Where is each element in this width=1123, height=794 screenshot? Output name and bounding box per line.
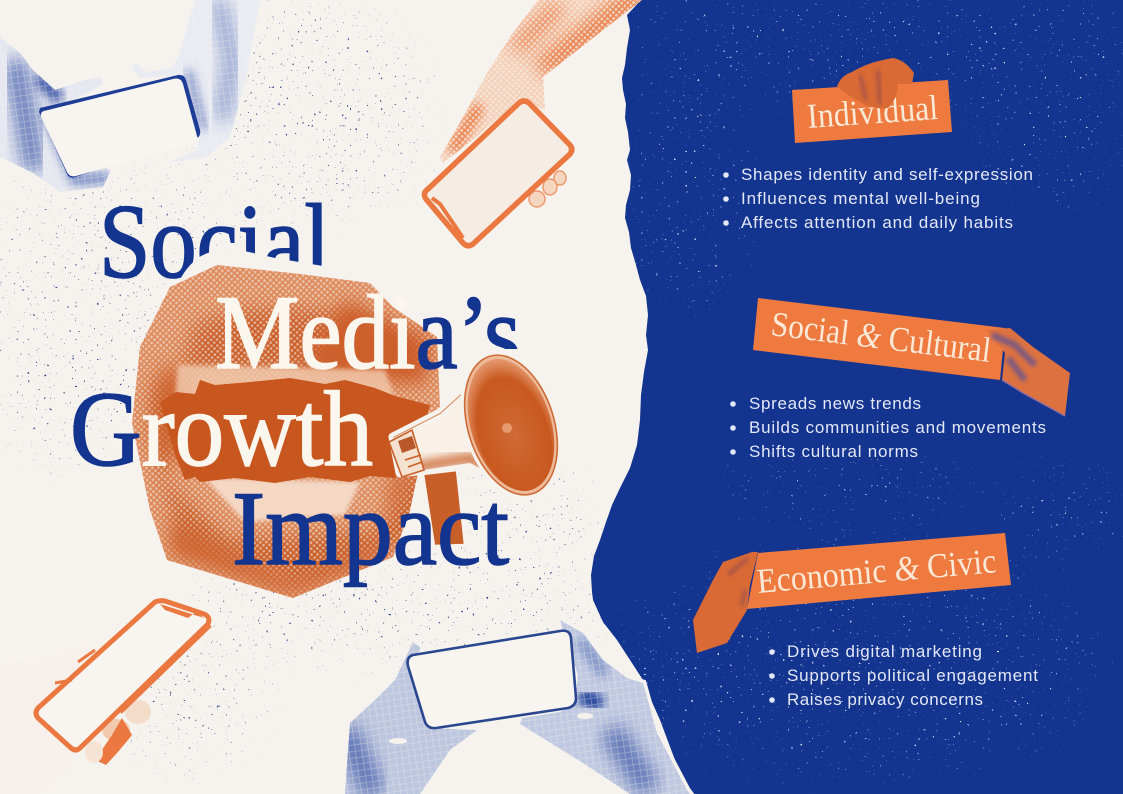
panel: torn blue paper xyxy=(591,0,1123,794)
speckle texture: paper xyxy=(0,0,618,790)
speckle texture: panel xyxy=(600,0,1123,794)
title word: Impact: Impact xyxy=(232,470,509,587)
section: economic and civic xyxy=(693,533,1038,709)
right hand xyxy=(130,0,265,170)
halftone dots xyxy=(132,265,440,598)
title word: Media's: Media’s xyxy=(215,274,521,391)
illustration: bottom-left orange hand holding phone xyxy=(0,601,210,794)
arm and hand xyxy=(430,0,645,170)
upper teeth xyxy=(175,365,395,398)
tag: social and cultural: Social & Cultural xyxy=(769,304,993,370)
phone xyxy=(424,101,572,246)
illustration: bottom blue hands holding phone xyxy=(340,615,695,794)
halo cutting title xyxy=(478,349,545,380)
bullet list: Supports political engagement xyxy=(787,666,1038,685)
handle xyxy=(423,470,465,546)
fingers xyxy=(529,171,566,207)
mouth opening xyxy=(160,378,430,483)
bullet list: Influences mental well-being xyxy=(741,189,980,208)
bullet list: Spreads news trends xyxy=(749,394,921,413)
bell xyxy=(443,336,579,514)
bullet list xyxy=(723,165,1033,232)
illustration: top-right orange hand holding phone xyxy=(424,0,645,246)
bullet list: Builds communities and movements xyxy=(749,418,1046,437)
phone xyxy=(39,75,200,178)
section: individual xyxy=(723,58,1033,232)
phone xyxy=(36,601,209,750)
mouthpiece xyxy=(389,430,424,477)
bullet list xyxy=(769,642,1038,709)
bullet list xyxy=(730,394,1046,461)
bullet list: Shapes identity and self-expression xyxy=(741,165,1033,184)
icon: hand holding tag xyxy=(693,552,758,653)
icon: hand holding tag xyxy=(987,328,1070,416)
icon: hand gripping tag xyxy=(837,58,914,108)
tag: economic and civic: Economic & Civic xyxy=(755,541,998,601)
bullet list: Affects attention and daily habits xyxy=(741,213,1013,232)
section: social and cultural xyxy=(730,298,1070,461)
right hand xyxy=(515,615,695,794)
left hand xyxy=(0,37,110,192)
hand halo xyxy=(560,620,690,794)
illustration: shouting mouth xyxy=(132,265,440,598)
cone xyxy=(388,394,482,478)
bullet list: Drives digital marketing xyxy=(787,642,982,661)
phone xyxy=(408,631,576,728)
illustration: megaphone xyxy=(388,349,558,545)
lower teeth xyxy=(205,478,360,522)
title word: Social: Social xyxy=(99,183,330,300)
illustration: top-left hands holding phone xyxy=(0,0,265,200)
lips shading xyxy=(150,308,430,585)
mouth halo over title xyxy=(175,250,445,410)
title word: Growth: Growth xyxy=(70,371,373,489)
fingers xyxy=(85,700,151,765)
tag: individual: Individual xyxy=(806,88,939,136)
bullet list: Shifts cultural norms xyxy=(749,442,918,461)
left hand xyxy=(345,642,477,794)
faint hand xyxy=(0,640,90,794)
bullet list: Raises privacy concerns xyxy=(787,690,983,709)
